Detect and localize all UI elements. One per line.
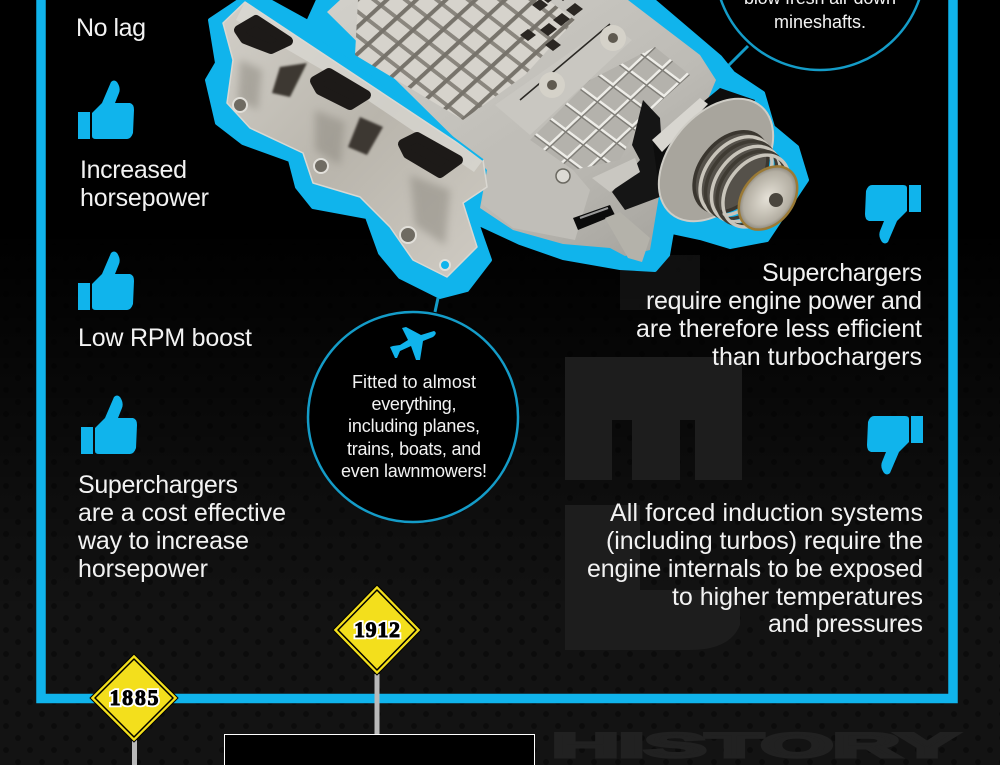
timeline sign 1912 [333,585,421,675]
circle connector: top [728,46,748,66]
tube [605,212,650,262]
timeline sign 1912: 1912 [354,617,400,642]
pulley grooves [679,117,803,240]
pulley drum [653,88,755,210]
con: higher temperatures [587,499,923,638]
history ghost heading: HISTORY [552,727,959,765]
pro: no lag: No lag [76,14,146,42]
con: higher temperatures: engine internals to be exposed [587,555,923,583]
manifold gaps [272,63,383,155]
blue seam [322,40,483,160]
silver collar [652,98,708,152]
callout: fitted to almost everything [308,312,518,522]
callout: mineshafts [715,0,925,70]
icon: thumb up 1 [78,80,134,139]
con: less efficient: are therefore less efficient [636,315,922,343]
pro: cost effective: are a cost effective [78,499,286,527]
pro: cost effective: way to increase [77,527,249,555]
timeline sign 1885: 1885 [110,685,158,710]
con: higher temperatures: (including turbos) require the [606,527,923,555]
pro: cost effective: horsepower [78,555,208,583]
pro: low rpm boost: Low RPM boost [78,324,252,352]
callout: fitted to almost everything: Fitted to almost [352,372,476,392]
icon: thumb up 3 [81,396,137,454]
timeline sign 1912: 1912 [354,617,400,642]
electrical connector [556,100,665,230]
con: higher temperatures: and pressures [768,610,923,638]
ghost lettering [565,255,742,650]
icon: thumb down 2 [867,416,923,474]
timeline pole 1885 [132,740,137,765]
pulley disc [636,77,796,243]
con: less efficient: require engine power and [646,287,922,315]
con: higher temperatures: All forced induction systems [610,499,923,527]
icon: plane [390,327,436,360]
lower casing shade [482,140,590,240]
con: less efficient [636,259,922,371]
callout: fitted to almost everything: everything, [372,394,456,414]
intake ports [239,20,458,173]
pulley cap [727,155,809,241]
pro: increased horsepower: Increased [80,156,187,184]
con: less efficient: than turbochargers [712,343,922,371]
callout: fitted to almost everything: trains, boats, and [347,439,481,459]
timeline pole 1912 [374,674,380,734]
front ribbed cover [530,47,690,170]
flange edge [236,2,483,172]
mount bolts [233,98,450,270]
timeline sign 1885 [90,654,178,742]
top plate [433,0,500,25]
body casing [327,0,716,256]
intake manifold [223,2,487,277]
callout: fitted to almost everything: even lawnmowers! [341,461,487,481]
supercharger engine [207,0,809,297]
pro: cost effective [77,471,286,583]
plane callout connector [435,298,438,312]
timeline text box [224,734,535,765]
icon: thumb down 1 [865,185,921,244]
pro: increased horsepower: horsepower [80,184,209,212]
ribbed grid [355,0,575,120]
icon: thumb up 2 [78,252,134,310]
con: higher temperatures: to higher temperatures [672,583,923,611]
timeline sign 1885: 1885 [110,685,158,710]
callout: fitted to almost everything: including planes, [348,416,480,436]
pro: cost effective: Superchargers [78,471,238,499]
blue outline [207,0,807,297]
callout: mineshafts: mineshafts. [774,12,866,32]
dark vents [520,0,583,51]
rib band [495,24,632,135]
con: less efficient: Superchargers [762,259,922,287]
bosses [539,25,626,98]
manifold castings shade [238,60,450,245]
pro: increased horsepower [80,156,209,212]
